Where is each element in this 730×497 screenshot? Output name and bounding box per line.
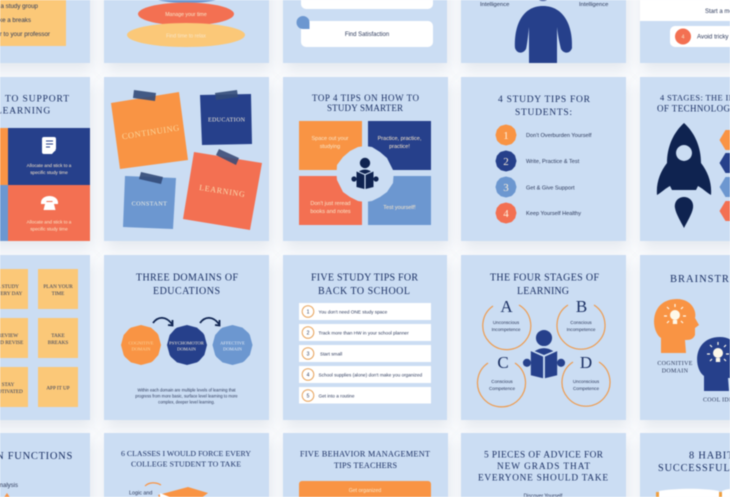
tip 3: 3: [307, 352, 310, 358]
quadrant labels: Don't just reread: [310, 201, 351, 207]
block: study time red: Allocate and stick to a: [27, 220, 72, 224]
block: study time blue: specific study time: [30, 170, 68, 175]
tip 2: Write, Practice & Test: [526, 159, 580, 165]
panel: avoid tricky: [640, 0, 730, 63]
title: 4 STUDY TIPS FOR: [498, 95, 591, 105]
quadrant labels: studying: [320, 144, 340, 150]
domain: cognitive: COGNITIVE: [128, 340, 154, 346]
tape: [216, 149, 239, 165]
title: [311, 272, 418, 297]
label: cognitive domain: DOMAIN: [662, 368, 689, 374]
stage A: Unconscious: [493, 320, 520, 325]
card: find satisfaction: Find Satisfaction: [345, 32, 389, 38]
note: education: EDUCATION: [208, 118, 246, 124]
panel: study habit sticky grid: [0, 255, 90, 420]
note: learning: [183, 152, 262, 230]
block: study time red: [8, 185, 90, 241]
ellipse: find time to relax: [127, 23, 245, 47]
note: education: [200, 94, 252, 145]
quadrant labels: practice!: [389, 144, 410, 150]
note labels: PLAN YOUR: [43, 284, 73, 290]
domain: psychomotor: [167, 325, 207, 365]
title: 5 PIECES OF ADVICE FOR: [484, 450, 604, 460]
marker: [3, 493, 11, 497]
quadrant labels: [310, 136, 422, 215]
title: [121, 449, 251, 468]
panel: brain heads: [640, 255, 730, 420]
list text: [0, 3, 50, 38]
tip 4: 4: [503, 208, 509, 220]
panel: 5 pieces of advice: [461, 433, 626, 497]
panel: 4 study tips for students: [461, 77, 626, 241]
title: BACK TO SCHOOL: [318, 286, 410, 297]
description: [135, 388, 238, 404]
panel: person intelligence: [461, 0, 626, 63]
title: BRAINSTR: [670, 274, 730, 285]
quadrant labels: Test yourself!: [383, 205, 416, 211]
note: constant: CONSTANT: [132, 200, 167, 208]
arrow: [145, 483, 161, 486]
ellipse: find time to relax: Find time to relax: [166, 34, 206, 40]
quadrant labels: Practice, practice,: [378, 136, 422, 142]
stage B: Conscious: [570, 320, 592, 325]
hexagons: [720, 130, 730, 221]
title: THE FOUR STAGES OF: [490, 272, 599, 284]
note: learning: LEARNING: [199, 183, 246, 199]
title: [478, 450, 608, 484]
title: STUDENTS:: [515, 108, 572, 118]
label: Logic and: [129, 490, 152, 496]
icon: person: [515, 0, 572, 63]
button: get organized: Get organized: [349, 488, 381, 494]
tip 5: Get into a routine: [318, 394, 355, 398]
domain: affective: [212, 325, 252, 365]
icon: open book: [656, 489, 730, 497]
note labels: TAKE: [51, 333, 65, 339]
tip 1: 1: [503, 130, 509, 142]
list item 4: 4: [682, 34, 685, 40]
block: study time blue: Allocate and stick to a: [27, 163, 72, 168]
tip 4: [496, 202, 581, 224]
domain: cognitive: [121, 325, 161, 365]
icon: rocket: [657, 123, 711, 228]
title: [498, 95, 591, 118]
title: TIPS TEACHERS: [334, 461, 397, 470]
title: [0, 94, 69, 116]
title: 6 CLASSES I WOULD FORCE EVERY: [121, 449, 251, 458]
tip 1: Don't Overburden Yourself: [526, 133, 592, 139]
stage D: D: [580, 353, 592, 372]
labels: Intelligence: [579, 2, 608, 8]
tip 4: 4: [307, 372, 310, 378]
title: [657, 94, 730, 114]
block: study time blue: [8, 128, 90, 185]
stage A: [483, 297, 531, 350]
tip 3: 3: [503, 182, 509, 194]
list item 4: [670, 26, 730, 47]
icon: document: [42, 137, 56, 154]
domain: psychomotor: DOMAIN: [177, 346, 197, 352]
note labels: STAY: [2, 382, 15, 388]
domain: psychomotor: PSYCHOMOTOR: [169, 340, 205, 346]
panel: top 4 tips: [283, 77, 448, 241]
tip 2: Track more than HW in your school planner: [318, 330, 409, 336]
title: LEARNING: [517, 286, 569, 297]
description: complex, deeper level learning.: [158, 400, 215, 404]
stage B: B: [576, 297, 587, 316]
panel: study group list: [0, 0, 90, 63]
arrow: [200, 318, 220, 326]
stage D: Unconscious: [573, 379, 600, 384]
card: find satisfaction: [301, 21, 433, 47]
title: [658, 450, 730, 474]
label: cognitive domain: [657, 361, 693, 374]
title: TO SUPPORT: [5, 94, 69, 104]
tip 2: 2: [307, 330, 310, 336]
stage C: [478, 353, 526, 407]
tip 2: 2: [503, 156, 509, 168]
title: THREE DOMAINS OF: [136, 272, 238, 284]
title: [490, 272, 599, 297]
title: EDUCATIONS: [153, 286, 220, 297]
note grid: [0, 269, 78, 407]
labels: [480, 2, 608, 8]
icon: reader: [523, 330, 565, 378]
note labels: [0, 284, 73, 395]
tip 1: 1: [307, 310, 310, 316]
panel: 8 habits: [640, 433, 730, 497]
stage A: Incompetence: [492, 327, 521, 332]
note: continuing: CONTINUING: [121, 122, 180, 141]
stage C: Conscious: [491, 379, 513, 384]
ellipse: manage your time: [138, 2, 234, 26]
icon: orange head: [654, 299, 699, 353]
tip 3: [299, 345, 431, 362]
label: nalysis: [0, 483, 18, 489]
title: FIVE STUDY TIPS FOR: [311, 272, 418, 284]
title: FIVE BEHAVIOR MANAGEMENT: [300, 450, 430, 458]
tip 2: [299, 324, 431, 341]
domain: affective: AFFECTIVE: [220, 340, 245, 346]
tape: [139, 172, 163, 184]
list text: a study group: [0, 3, 39, 10]
panel: ways to support learning: [0, 77, 90, 241]
panel: five study tips: [283, 255, 447, 420]
panel: four stages of learning: [461, 255, 626, 420]
note labels: BREAKS: [48, 340, 68, 346]
tip 1: [299, 303, 431, 320]
title: COLLEGE STUDENT TO TAKE: [131, 460, 241, 468]
labels: Intelligence: [480, 2, 509, 8]
panel: 6 classes: [104, 433, 269, 497]
tip 4: [299, 366, 431, 383]
note labels: APP IT UP: [46, 386, 70, 392]
panel: sticky notes: [104, 77, 269, 241]
arrow: [153, 318, 172, 326]
block: study time red: specific study time: [30, 226, 68, 232]
quadrant: test: [368, 176, 431, 225]
icon: blue head: [697, 337, 730, 391]
label: cognitive domain: COGNITIVE: [657, 361, 693, 367]
note: constant: [123, 176, 176, 229]
title: EVERYONE SHOULD TAKE: [478, 474, 608, 484]
tape: [133, 90, 156, 101]
title: [136, 272, 238, 297]
tip 4: School supplies (alone) don't make you organized: [318, 372, 422, 378]
panel: five behavior tips: [283, 433, 448, 497]
panel: functions: [0, 433, 90, 497]
stage C: C: [497, 353, 509, 372]
badge: [296, 16, 310, 29]
tip 2: [496, 150, 580, 172]
quadrant: practice: [368, 121, 431, 170]
tip 1: You don't need ONE study space: [318, 310, 388, 314]
quadrant: don't reread: [299, 176, 362, 225]
stage C: Competence: [489, 386, 515, 391]
tip 4: Keep Yourself Healthy: [526, 211, 581, 217]
tip 5: 5: [307, 394, 310, 400]
icon: reader: [351, 158, 379, 189]
tip 3: Start small: [320, 352, 342, 356]
tip 3: [496, 176, 575, 198]
button: get organized: [299, 481, 431, 497]
panel: three domains: [104, 255, 269, 420]
quadrant labels: books and notes: [310, 209, 351, 215]
tip 5: [299, 387, 431, 404]
title: TOP 4 TIPS ON HOW TO: [312, 93, 420, 103]
panel: 4 stages rocket: [640, 77, 730, 241]
stage D: Competence: [573, 386, 599, 391]
title: STUDY SMARTER: [327, 103, 403, 113]
description: Within each domain are multiple levels of learning that: [137, 388, 236, 392]
stage B: [557, 297, 605, 349]
title: NEW GRADS THAT: [497, 462, 590, 472]
domain: cognitive: DOMAIN: [132, 346, 151, 352]
tape: [215, 90, 238, 100]
panel: find satisfaction: [283, 0, 447, 63]
center octagon: [336, 146, 394, 202]
list text: r to your professor: [0, 31, 50, 38]
note: continuing: [111, 92, 188, 169]
stage A: A: [500, 297, 513, 316]
tip 1: [496, 124, 592, 146]
domain: affective: DOMAIN: [223, 346, 243, 352]
tip 3: Get & Give Support: [526, 186, 575, 192]
note labels: TIME: [52, 291, 64, 297]
panel: stacked ellipses: [104, 0, 269, 63]
description: progress from more basic, surface level learning to more: [135, 394, 238, 398]
quadrant labels: Space out your: [312, 136, 349, 142]
title: [300, 450, 430, 470]
icon: graduation book: [158, 487, 208, 497]
quadrant: space out: [299, 121, 362, 170]
stage D: [562, 353, 610, 406]
icon: telephone: [41, 196, 58, 210]
stage B: Incompetence: [567, 327, 596, 332]
title: [312, 93, 420, 113]
ellipse: manage your time: Manage your time: [165, 12, 207, 18]
